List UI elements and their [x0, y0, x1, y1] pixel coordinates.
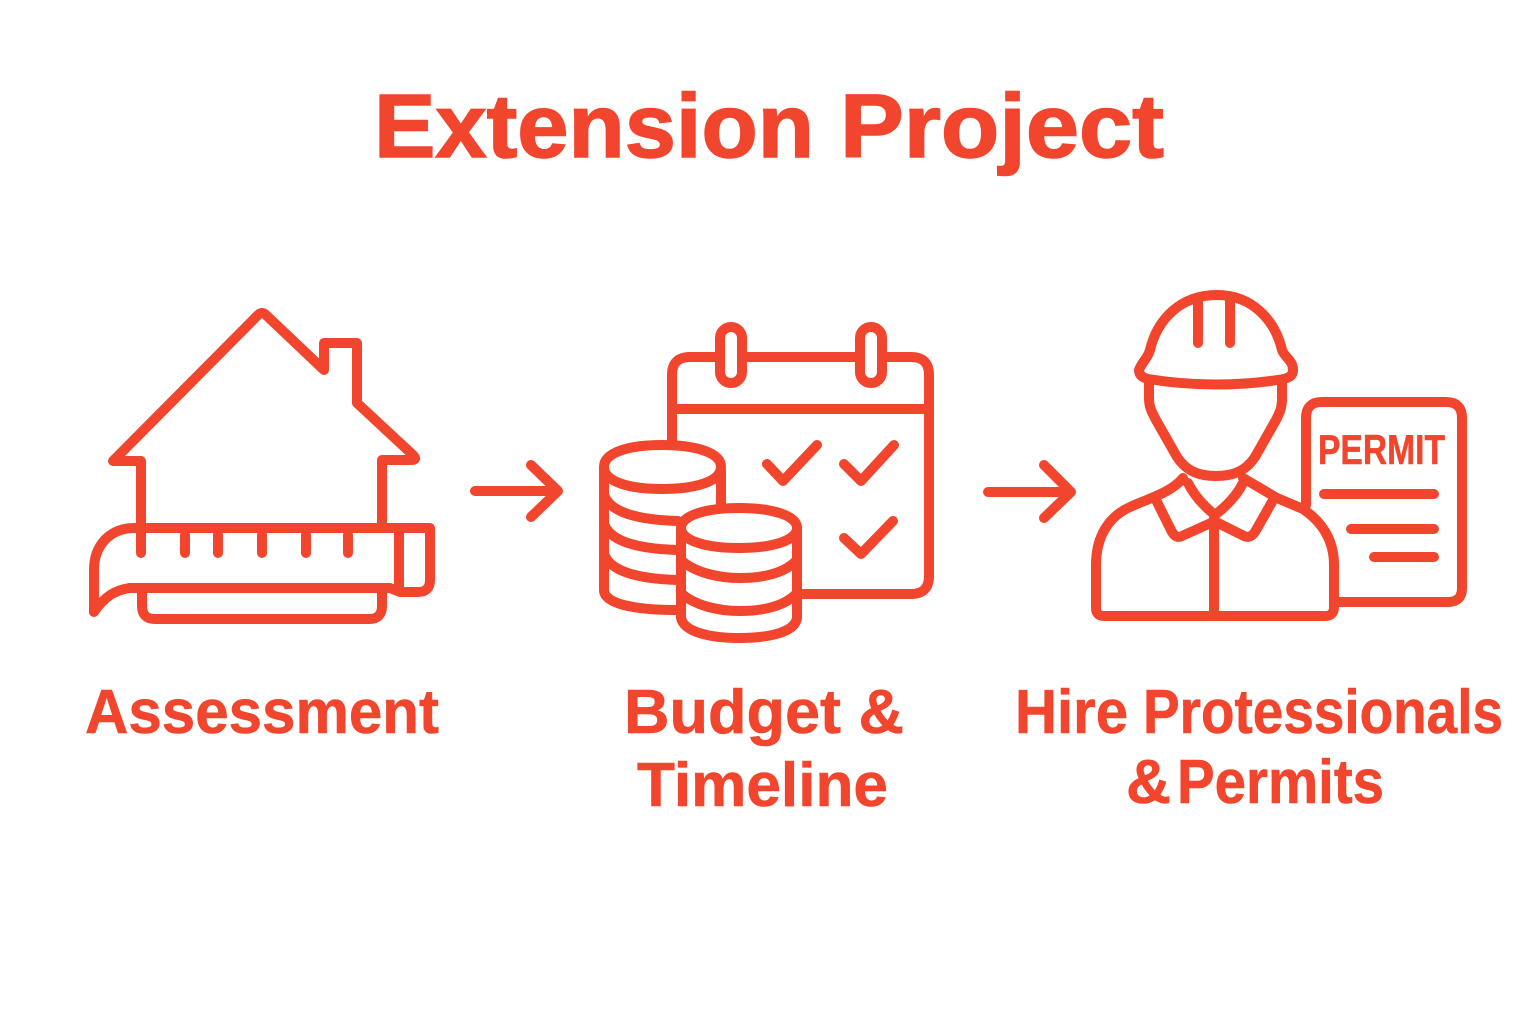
icon: calendar with coins	[604, 327, 929, 638]
worker body	[1096, 384, 1334, 616]
house outline	[113, 313, 415, 528]
icon: house with measuring tape	[94, 313, 430, 619]
measuring tape	[94, 528, 430, 619]
permit document: PERMIT	[1318, 426, 1445, 473]
label: budget and timeline	[624, 678, 904, 820]
permit document	[1306, 402, 1462, 602]
label: hire professionals and permits	[1015, 678, 1503, 817]
arrow: assessment to budget	[475, 465, 558, 517]
calendar	[672, 327, 929, 594]
icon: worker with permit	[1096, 295, 1462, 616]
label: hire professionals and permits: &	[1126, 748, 1171, 817]
label: hire professionals and permits: Permits	[1177, 748, 1384, 817]
title	[374, 77, 1164, 177]
title: Project	[840, 77, 1164, 177]
coin stack left	[604, 445, 721, 610]
arrow: budget to professionals	[988, 465, 1071, 518]
title: Extension	[374, 77, 814, 177]
coin stack right	[681, 508, 797, 638]
label: assessment: Assessment	[85, 678, 439, 747]
label: budget and timeline: Timeline	[637, 751, 888, 820]
label: hire professionals and permits: Hire	[1015, 678, 1128, 747]
hard hat	[1139, 295, 1293, 384]
label: budget and timeline: Budget &	[624, 678, 904, 747]
